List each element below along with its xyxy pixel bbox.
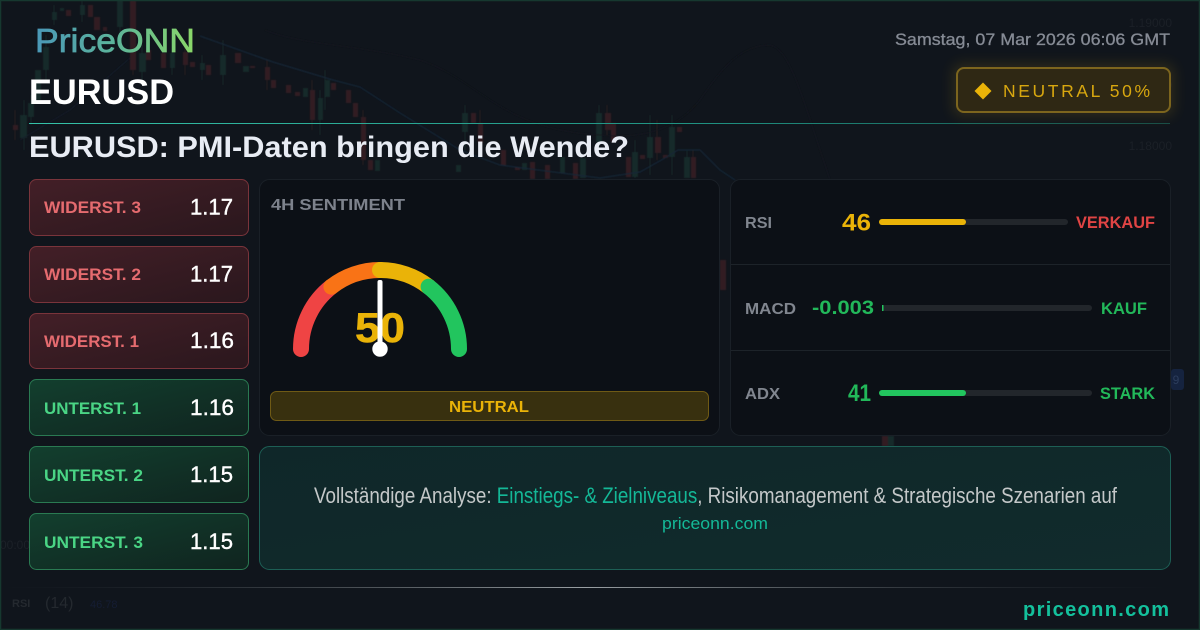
level: Unterst. 1 (30, 380, 248, 436)
gauge needle (372, 280, 388, 357)
indicator: ADX (745, 380, 1155, 407)
title: EURUSD: PMI-Daten bringen die Wende? (29, 131, 629, 164)
gauge value: 50 (355, 304, 405, 351)
sentiment pill (270, 392, 708, 420)
level: Widerst. 1: 1.16 (190, 328, 234, 353)
gauge (301, 270, 459, 357)
icon: diamond (974, 82, 992, 100)
level: Widerst. 2: WIDERST. 2 (44, 266, 141, 284)
level: Unterst. 3 (30, 514, 248, 570)
background chart: 1.19000 (1129, 16, 1172, 30)
level: Widerst. 3: WIDERST. 3 (44, 199, 141, 217)
panel: 4H sentiment (260, 180, 720, 436)
call to action link: priceonn.com (662, 514, 768, 533)
panel: call to action (260, 446, 1170, 570)
footer url: priceonn.com (1023, 599, 1169, 621)
sentiment pill: NEUTRAL (449, 399, 529, 416)
background chart: 1.18000 (1129, 139, 1172, 153)
background chart: RSI (12, 598, 30, 610)
logo: PriceONN (35, 22, 195, 59)
indicator: MACD (745, 297, 1147, 319)
level: Widerst. 1 (30, 314, 248, 368)
symbol heading: EURUSD (29, 73, 174, 112)
indicator: RSI: RSI (745, 215, 772, 232)
background chart: 1.18500 (1129, 78, 1172, 92)
indicator: RSI (745, 210, 1155, 236)
level: Widerst. 1: WIDERST. 1 (44, 333, 139, 351)
footer divider (0, 587, 1170, 588)
level: Widerst. 3: 1.17 (190, 194, 233, 220)
level: Unterst. 1: 1.16 (190, 395, 234, 420)
level: Unterst. 2 (30, 446, 248, 502)
badge: neutral 50% (952, 63, 1175, 117)
level: Unterst. 3: UNTERST. 3 (44, 534, 143, 552)
indicator: ADX: ADX (745, 386, 780, 403)
background chart: (14) (45, 595, 73, 612)
date: Samstag, 07 Mar 2026 06:06 GMT (895, 30, 1170, 49)
level: Unterst. 1: UNTERST. 1 (44, 400, 141, 418)
indicator: MACD: MACD (745, 301, 796, 318)
badge: neutral 50%: NEUTRAL 50% (1003, 81, 1150, 101)
background chart: 46.78 (90, 599, 118, 611)
level: Unterst. 2: UNTERST. 2 (44, 467, 143, 485)
indicator: ADX: STARK (1100, 385, 1155, 403)
panel: indicators (730, 180, 1170, 436)
level: Unterst. 2: 1.15 (190, 462, 233, 487)
sentiment heading: 4H SENTIMENT (271, 197, 405, 214)
level: Widerst. 2: 1.17 (190, 262, 233, 286)
header divider (29, 123, 1170, 124)
level: Widerst. 2 (30, 246, 248, 302)
indicator: MACD: KAUF (1101, 300, 1147, 318)
indicator: ADX: 41 (848, 380, 871, 407)
indicator: RSI: VERKAUF (1076, 214, 1155, 232)
level: Unterst. 3: 1.15 (190, 529, 233, 554)
indicator: MACD: -0.003 (812, 297, 874, 319)
indicator: RSI: 46 (842, 210, 871, 236)
background chart: 9 (1173, 373, 1180, 387)
background chart: 00:00 (0, 538, 30, 552)
level: Widerst. 3 (30, 180, 248, 236)
call to action text: Vollständige Analyse: Einstiegs- & Zielniveaus, Risikomanagement & Strategische Szenarien auf (314, 483, 1118, 508)
